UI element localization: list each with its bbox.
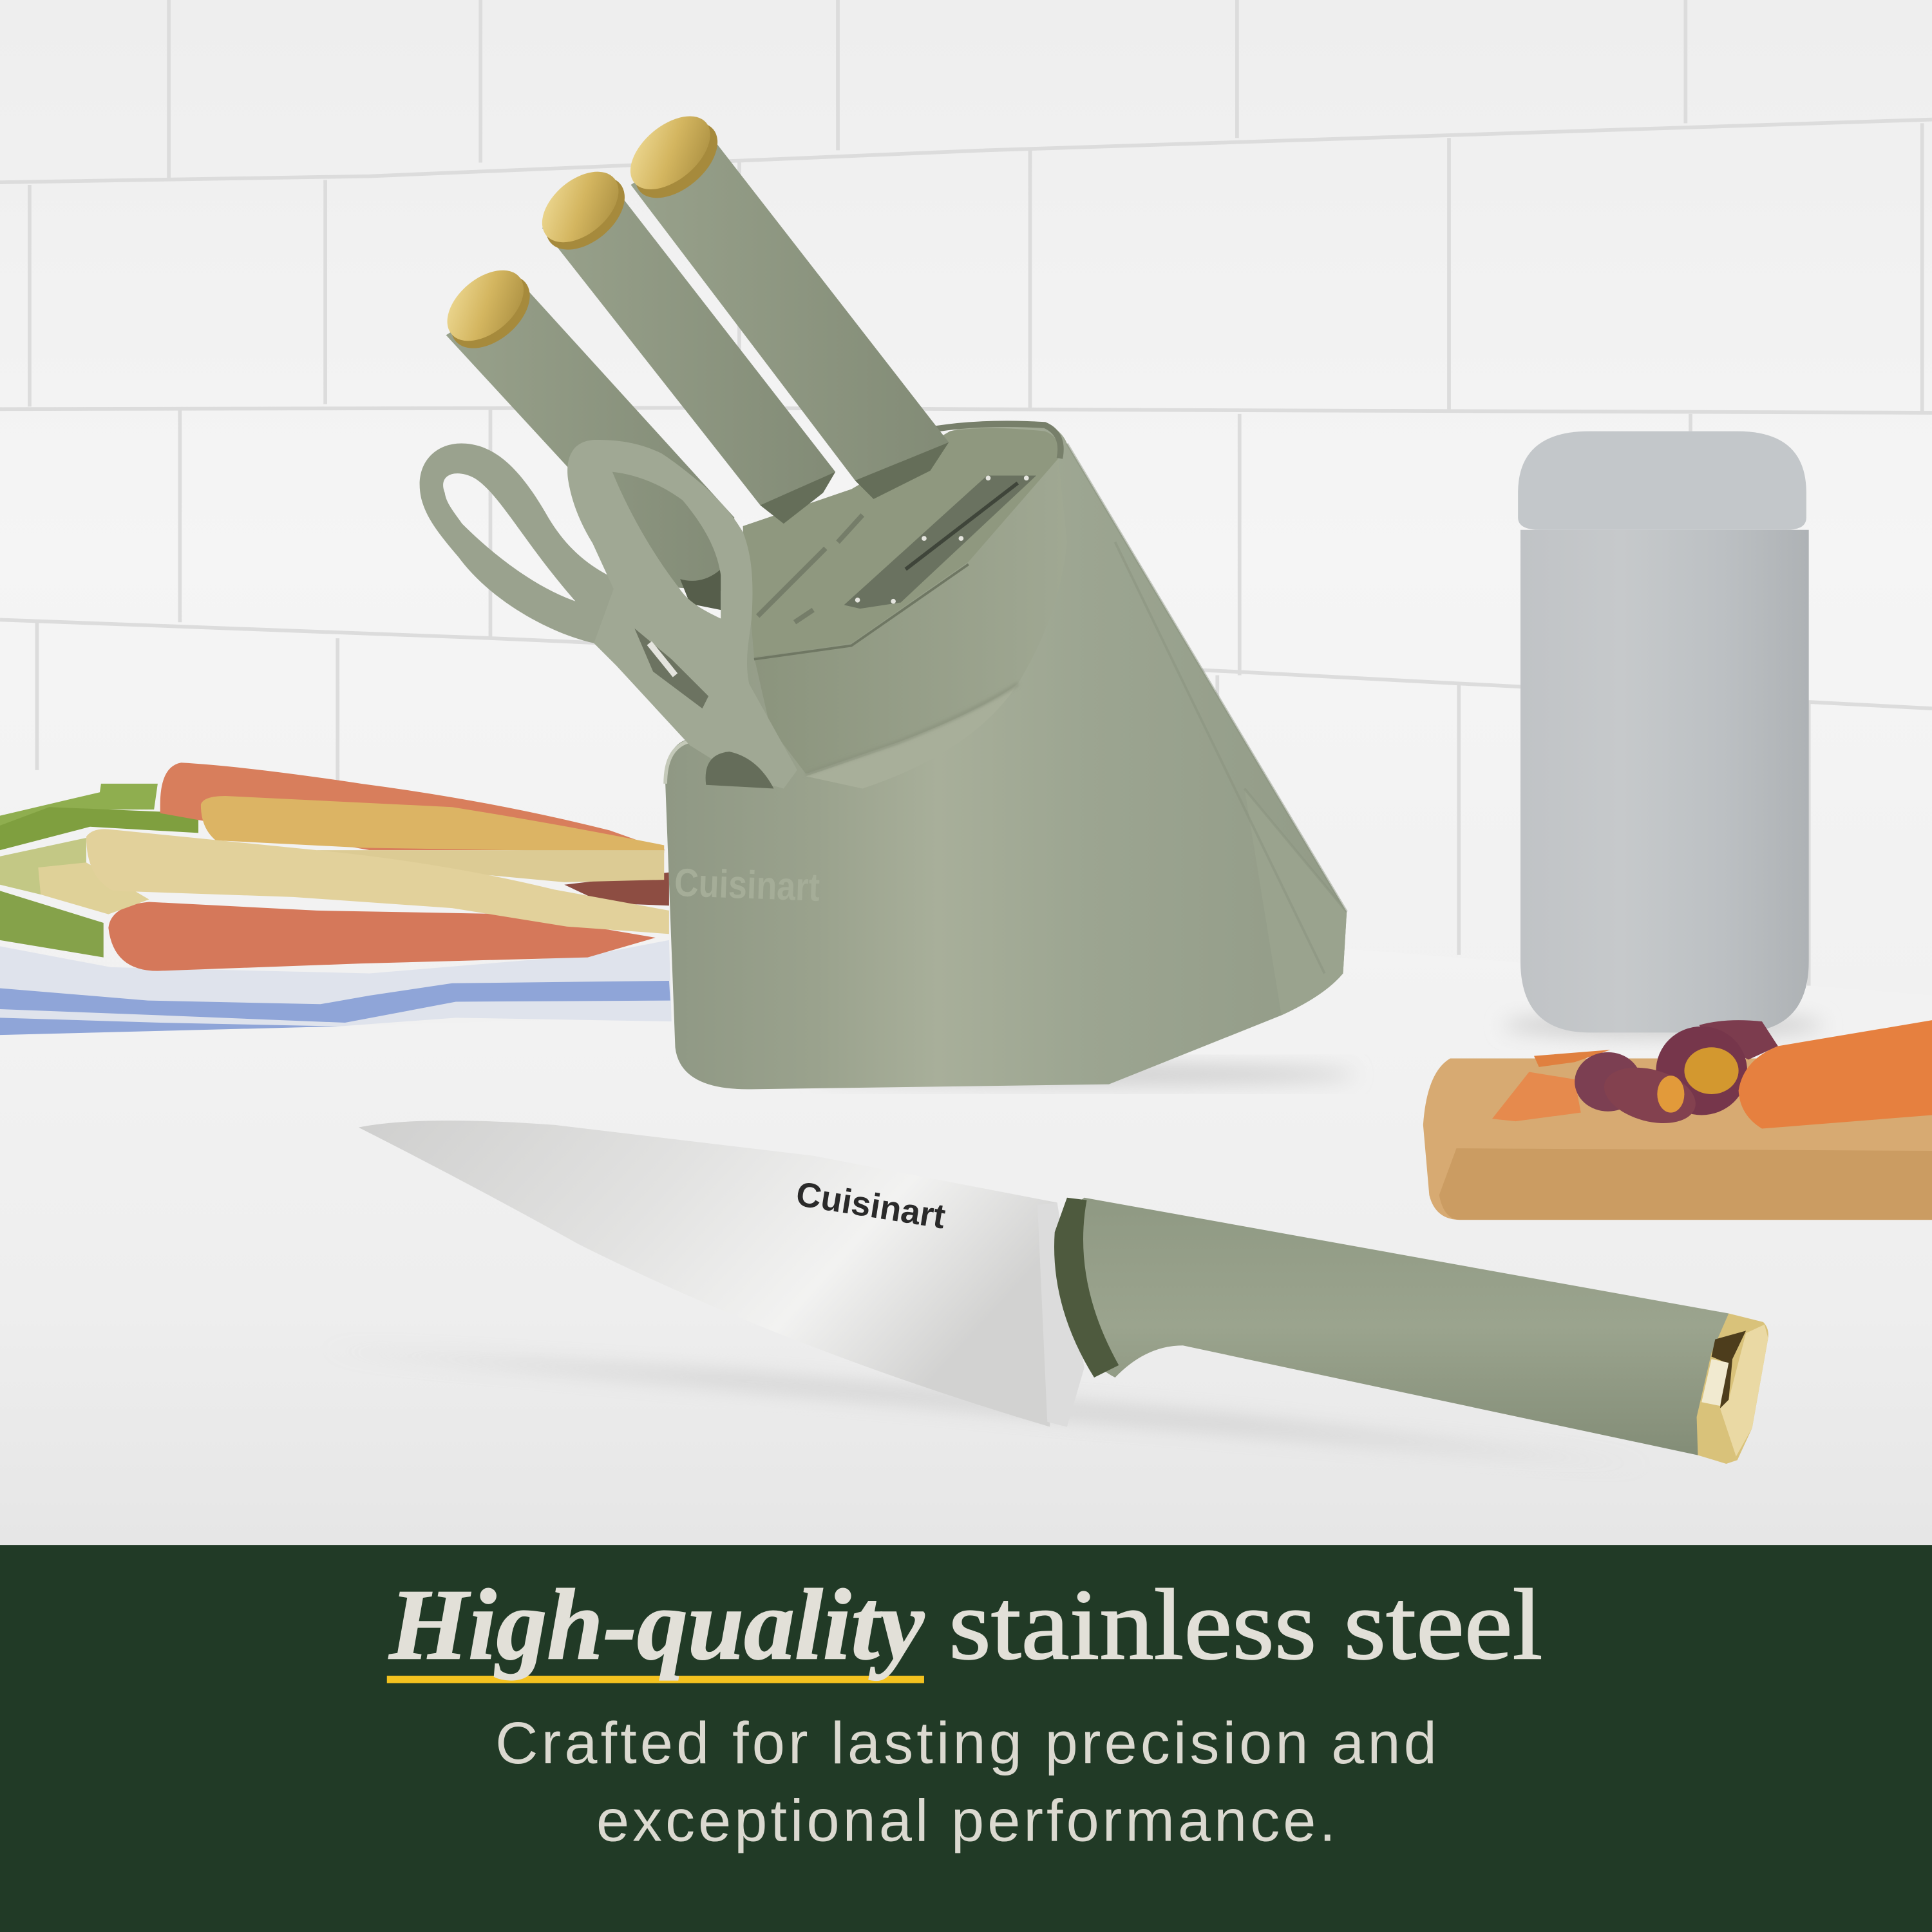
subheading: exceptional performance. bbox=[596, 1788, 1336, 1853]
right facets bbox=[1244, 788, 1347, 1016]
top plate bbox=[743, 428, 1059, 657]
parsnips bbox=[317, 850, 664, 882]
scoop edge highlight bbox=[806, 684, 1018, 788]
orange carrot, top bbox=[160, 762, 665, 850]
subheading bbox=[495, 1710, 1437, 1853]
board front edge bbox=[1439, 1148, 1932, 1220]
gold cap bbox=[1697, 1314, 1768, 1464]
background: tiled wall bbox=[0, 0, 1932, 1109]
pivot bbox=[706, 752, 774, 788]
serrated gap bbox=[634, 629, 708, 708]
bottom caption band bbox=[0, 1545, 1932, 1932]
subheading: Crafted for lasting precision and bbox=[495, 1710, 1437, 1776]
knife slots bbox=[758, 515, 862, 622]
block shadow bbox=[813, 1065, 1356, 1084]
base lip highlight bbox=[665, 742, 688, 784]
blade logo: Cuisinart bbox=[793, 1175, 948, 1236]
carrot pieces bbox=[1492, 1020, 1932, 1133]
plate rim bbox=[936, 424, 1061, 459]
green tops bbox=[0, 784, 158, 831]
bottle bbox=[1503, 431, 1824, 1037]
orange carrot, lower bbox=[108, 902, 656, 971]
handle 2 bbox=[529, 158, 835, 524]
handle 1 bbox=[617, 102, 949, 499]
heading: High-quality bbox=[388, 1568, 925, 1680]
knife shadow bbox=[320, 1349, 1651, 1466]
scissors left loop bbox=[420, 443, 641, 643]
heading bbox=[387, 1568, 1542, 1683]
embossed logo: Cuisinart bbox=[674, 860, 820, 909]
carrots and towel bbox=[0, 762, 672, 1035]
scissors right loop and body bbox=[567, 440, 797, 788]
heading underline bbox=[387, 1676, 924, 1683]
bolster bbox=[1037, 1202, 1084, 1427]
knife block bbox=[665, 421, 1356, 1089]
cutting board with carrots bbox=[1423, 1020, 1932, 1220]
countertop bbox=[0, 949, 1932, 1545]
knife handles in block bbox=[434, 102, 949, 610]
towel bbox=[0, 940, 672, 1035]
handle bbox=[1059, 1198, 1728, 1455]
cap dark reflection bbox=[1712, 1331, 1746, 1408]
chef's knife bbox=[320, 1121, 1768, 1466]
scissors bbox=[420, 440, 797, 788]
peeler slot bbox=[844, 476, 1036, 609]
handle collar bbox=[1054, 1198, 1119, 1378]
handle 3 bbox=[434, 256, 734, 610]
cap end face bbox=[1720, 1325, 1768, 1456]
collar between plate and scoop bbox=[754, 459, 1067, 774]
cap light reflection bbox=[1701, 1359, 1728, 1406]
main body bbox=[665, 421, 1347, 1089]
blade bbox=[359, 1121, 1057, 1427]
red carrot behind bbox=[564, 873, 669, 905]
yellow carrot bbox=[201, 796, 664, 853]
heading: stainless steel bbox=[949, 1568, 1542, 1680]
